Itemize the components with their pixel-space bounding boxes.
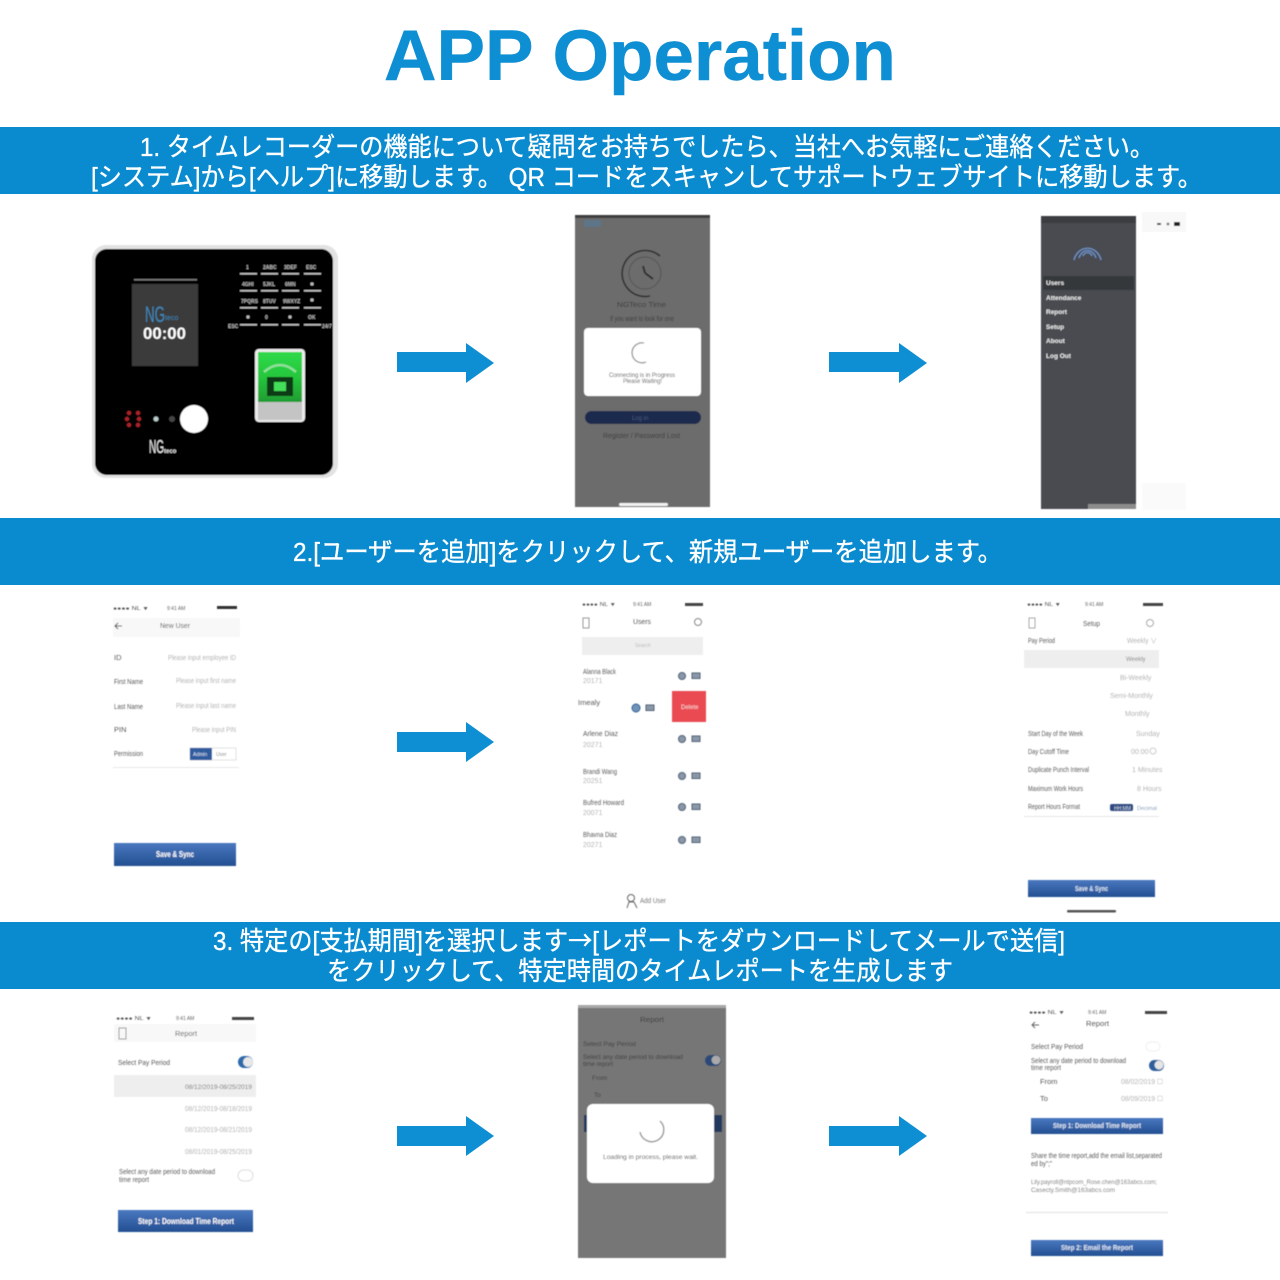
phone: users list: ●●●● NL ▼ (582, 602, 616, 608)
menu items: About (1046, 338, 1066, 345)
device keypad: 7PQRS (241, 299, 259, 305)
user rows: Bhavna Diaz (583, 830, 617, 839)
phone: email report: 9:41 AM (1088, 1010, 1106, 1016)
status icons fragment (1142, 212, 1186, 510)
setup fields: Duplicate Punch Interval (1028, 765, 1089, 774)
phone: new user form: New User (160, 621, 190, 630)
date range fields: time report (1031, 1063, 1062, 1072)
phone: email report: ●●●● NL ▼ (1029, 1010, 1065, 1016)
form fields: Please input first name (176, 678, 236, 685)
banner: step 2 (0, 518, 1280, 585)
form fields: Please input last name (176, 703, 236, 710)
setup fields: Decimal (1137, 806, 1157, 812)
banner: step 1: 1. タイムレコーダーの機能について疑問をお持ちでしたら、当社へお気軽にご連絡ください。 (140, 132, 1154, 162)
date list: 08/01/2019-08/25/2019 (185, 1149, 252, 1156)
phone: setup: Setup (1083, 619, 1100, 628)
save and sync button (1028, 880, 1155, 897)
phone: connecting screen: If you want to look for one (610, 316, 674, 323)
step 1 button: Step 1: Download Time Report (138, 1217, 234, 1226)
banner: step 3: をクリックして、特定時間のタイムレポートを生成します (327, 956, 953, 986)
phone: setup (1024, 602, 1163, 912)
save and sync button: Save & Sync (156, 850, 194, 859)
device screen: teco (165, 315, 178, 322)
setup fields: HH:MM (1114, 806, 1131, 812)
phone: loading report (578, 1005, 726, 1258)
banner: step 3: 3. 特定の[支払期間]を選択します→[レポートをダウンロードしてメールで送信] (213, 921, 1065, 958)
phone: loading report: Report (640, 1015, 665, 1024)
device keypad: 1 (246, 265, 249, 271)
login button (585, 411, 701, 424)
connecting dialog: Connecting is in Progress (609, 373, 675, 379)
device keypad: 6MN (285, 282, 296, 288)
device keypad (228, 265, 332, 330)
form fields: First Name (114, 677, 143, 686)
date range fields: From (1040, 1077, 1058, 1086)
device screen (132, 279, 198, 366)
date range fields: Select Pay Period (1031, 1042, 1083, 1051)
loading dialog (587, 1104, 714, 1183)
pay period options (1024, 636, 1159, 718)
date range fields (1031, 1042, 1164, 1103)
date range fields: 08/09/2019 ☐ (1121, 1095, 1163, 1103)
banner: step 1 (0, 127, 1280, 194)
phone: new user form: 9:41 AM (167, 606, 185, 612)
pay period options: Weekly (1126, 657, 1146, 663)
phone: side menu (1041, 216, 1136, 509)
phone: report period selection: Report (175, 1029, 198, 1038)
user rows: 20251 (583, 778, 603, 785)
row icons (632, 672, 700, 844)
arrow: row 1 left (397, 343, 494, 383)
arrow: row 2 left (397, 722, 494, 762)
phone: loading report: Select Pay Period (583, 1041, 636, 1048)
connecting dialog: Please Waiting! (623, 379, 662, 385)
user rows: Brandi Wang (583, 767, 617, 776)
save and sync button: Save & Sync (1075, 886, 1108, 893)
user rows: Arlene Diaz (583, 729, 618, 738)
setup fields: Day Cutoff Time (1028, 747, 1069, 756)
share text: Casecty.Smith@163abcs.com (1031, 1187, 1115, 1194)
step 1 button (118, 1210, 253, 1232)
pay period options: Pay Period (1028, 636, 1055, 645)
custom date option: time report (119, 1175, 150, 1184)
connecting dialog (584, 328, 701, 396)
menu items: Report (1046, 309, 1068, 316)
delete button: Delete (681, 705, 699, 711)
step 2 button: Step 2: Email the Report (1061, 1245, 1134, 1252)
custom date option (119, 1167, 253, 1184)
phone: loading report: To (594, 1092, 601, 1099)
setup fields: 1 Minutes (1132, 767, 1163, 774)
device screen: NG (145, 302, 165, 327)
clock logo (622, 251, 661, 297)
device keypad: 3DEF (284, 265, 297, 271)
pay period toggle (238, 1056, 253, 1068)
phone: report period selection (114, 1016, 256, 1232)
permission toggle: User (216, 752, 227, 758)
menu items: Attendance (1046, 295, 1082, 302)
phone: email report (1026, 1010, 1168, 1256)
device screen: 00:00 (143, 324, 186, 343)
share text: ed by";" (1031, 1159, 1052, 1168)
phone: report period selection: Select Pay Period (118, 1058, 170, 1067)
setup fields: Report Hours Format (1028, 802, 1081, 811)
share text: Lily.payroll@ntpcom_Rose.chen@163abcs.com; (1031, 1179, 1157, 1186)
arrow: row 1 right (829, 343, 927, 383)
phone: loading report: From (592, 1075, 607, 1082)
phone: users list (578, 602, 706, 908)
date list: 08/12/2019-08/25/2019 (185, 1084, 252, 1091)
phone: report period selection: ●●●● NL ▼ (116, 1016, 152, 1022)
menu items: Log Out (1046, 353, 1072, 360)
menu items: Users (1046, 280, 1064, 287)
device keypad: ESC (306, 265, 317, 271)
device keypad: OK (308, 315, 316, 321)
device logo: teco (164, 449, 177, 455)
phone: users list: Users (633, 617, 651, 626)
phone: connecting screen (575, 215, 710, 507)
arrow: row 3 left (397, 1116, 494, 1156)
custom date option: Select any date period to download (119, 1167, 215, 1176)
device keypad: 8TUV (263, 299, 276, 305)
phone: loading report: time report (583, 1061, 613, 1068)
form fields: Please input employee ID (168, 655, 236, 662)
form fields: Last Name (114, 702, 143, 711)
loading dialog: Loading in process, please wait. (603, 1154, 698, 1161)
phone: loading report: Select any date period to download (583, 1054, 683, 1061)
pay period options: Weekly ∨ (1127, 638, 1157, 645)
user rows: Imealy (578, 698, 600, 707)
permission toggle (190, 748, 236, 760)
step 2 button (1031, 1240, 1163, 1256)
save and sync button (114, 843, 236, 866)
form fields: ID (114, 653, 122, 662)
user rows: 20171 (583, 678, 603, 685)
phone: connecting screen: NGTeco Time (617, 302, 666, 309)
user rows: Bufred Howard (583, 798, 624, 807)
device fingerprint sensor (255, 349, 305, 422)
phone: new user form: ●●●● NL ▼ (113, 606, 149, 612)
device keypad: 24/7 (322, 324, 332, 330)
pay period options: Semi-Monthly (1110, 693, 1153, 700)
setup fields: 00:00 (1131, 749, 1149, 756)
device logo: NG (149, 437, 164, 457)
form fields: Permission (114, 749, 143, 758)
phone: setup: ●●●● NL ▼ (1027, 602, 1061, 608)
user rows (578, 667, 624, 849)
wifi logo (1074, 248, 1101, 260)
date range fields: To (1040, 1094, 1048, 1103)
title: APP Operation (384, 17, 896, 96)
arrow: row 3 right (829, 1116, 927, 1156)
device camera and infrared lights (125, 405, 208, 433)
form fields (114, 653, 236, 758)
permission toggle: Admin (193, 752, 207, 758)
delete button (672, 691, 706, 722)
date list: 08/12/2019-08/21/2019 (185, 1127, 252, 1134)
share text: Share the time report,add the email list,separated (1031, 1151, 1162, 1160)
setup fields: Maximum Work Hours (1028, 784, 1083, 793)
date range fields: Select any date period to download (1031, 1056, 1126, 1065)
device keypad: ESC (228, 324, 239, 330)
setup fields: Sunday (1136, 731, 1160, 738)
step 1 button (1031, 1118, 1163, 1134)
setup fields (1024, 729, 1163, 817)
menu items (1046, 280, 1082, 360)
device keypad: 4GHI (242, 282, 254, 288)
pay period options: Bi-Weekly (1120, 675, 1152, 682)
user rows: 20071 (583, 810, 603, 817)
banner: step 2: 2.[ユーザーを追加]をクリックして、新規ユーザーを追加します。 (293, 537, 1002, 567)
login button: Log in (632, 416, 648, 422)
device keypad: 9WXYZ (283, 299, 300, 305)
date list (114, 1075, 256, 1156)
phone: setup: 9:41 AM (1085, 602, 1103, 608)
phone: connecting screen: Register / Password Lost (603, 433, 680, 440)
phone: new user form (113, 606, 240, 866)
form fields: Please input PIN (192, 727, 236, 734)
device keypad: 2ABC (263, 265, 277, 271)
date range fields: 08/02/2019 ☐ (1121, 1078, 1163, 1086)
add user: Add User (640, 898, 667, 905)
share text (1026, 1151, 1168, 1213)
setup fields: Start Day of the Week (1028, 729, 1083, 738)
user rows: 20271 (583, 842, 603, 849)
banner: step 1: [システム]から[ヘルプ]に移動します。 QR コードをスキャンしてサポートウェブサイトに移動します。 (91, 162, 1202, 192)
device keypad: 0 (265, 315, 268, 321)
phone: report period selection: 9:41 AM (176, 1016, 194, 1022)
step 1 button: Step 1: Download Time Report (1053, 1123, 1142, 1130)
phone: users list: 9:41 AM (633, 602, 651, 608)
menu items: Setup (1046, 324, 1064, 331)
form fields: PIN (114, 725, 127, 734)
phone: email report: Report (1086, 1019, 1110, 1028)
user rows: Alanna Black (583, 667, 616, 676)
setup fields: 8 Hours (1137, 786, 1162, 793)
pay period options: Monthly (1125, 711, 1150, 718)
banner: step 3 (0, 921, 1280, 989)
user rows: 20271 (583, 742, 603, 749)
device keypad: 5JKL (263, 282, 275, 288)
device: face and fingerprint time recorder (92, 245, 338, 478)
add user (627, 894, 667, 908)
phone: users list: Search (635, 643, 651, 649)
date list: 08/12/2019-08/18/2019 (185, 1106, 252, 1113)
